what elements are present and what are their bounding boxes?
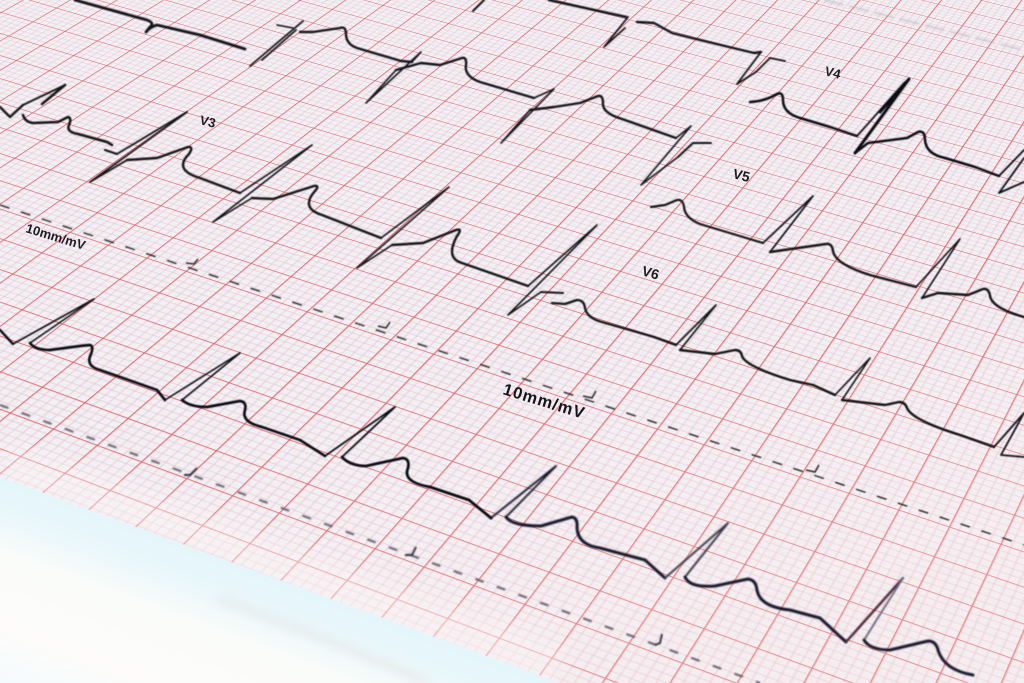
lead trace row: V6 — [552, 300, 1024, 457]
lead trace row: V5 — [651, 196, 1024, 317]
calibration dashed line: lower — [0, 405, 760, 683]
lead trace row: V4 — [750, 79, 1024, 193]
lead label: V6: V6 — [640, 263, 661, 283]
white surface below paper edge — [0, 477, 560, 683]
lead label: V3: V3 — [198, 112, 217, 131]
lead trace row: V3 — [0, 85, 597, 315]
lead trace row: rhythm strip at bottom — [0, 299, 491, 518]
calibration label: left: 10mm/mV — [24, 221, 88, 253]
top-right grey dashed line — [824, 0, 1024, 50]
lead label: V4: V4 — [823, 63, 843, 82]
calibration dashed line: middle — [0, 205, 1024, 545]
lead trace row: V1 and V2 top strip — [75, 0, 785, 185]
lead label: V5: V5 — [731, 165, 752, 185]
calibration label: centre: 10mm/mV — [501, 381, 587, 423]
rhythm strip continuation, defocused — [491, 466, 973, 675]
